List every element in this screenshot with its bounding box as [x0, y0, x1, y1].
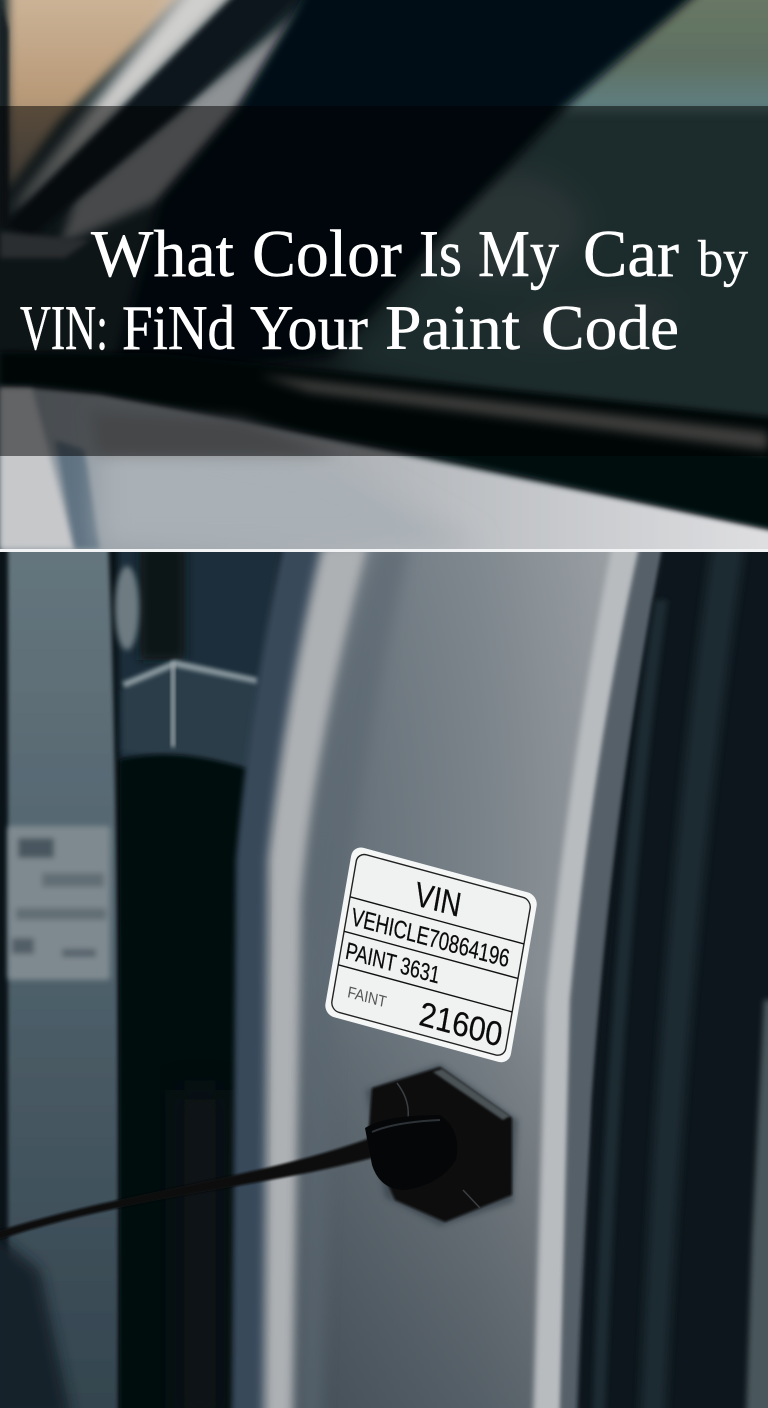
title line 1: by — [698, 231, 748, 288]
left door highlight — [0, 388, 75, 549]
shade beside left highlight — [298, 545, 410, 1408]
title line 2: Code — [541, 292, 679, 363]
blue door shadow — [55, 440, 100, 549]
blurred rear sticker — [8, 826, 110, 980]
title line 2: Your — [250, 292, 368, 363]
title line 1: Car — [583, 217, 679, 291]
socket highlight — [433, 1069, 510, 1120]
hinge bracket — [115, 566, 258, 768]
dark roof pillar — [110, 0, 712, 385]
sill highlight — [260, 375, 768, 450]
dark frame strip — [10, 0, 296, 232]
upper dark blue recess — [118, 545, 282, 770]
main grey pillar — [270, 545, 650, 1408]
far right edge — [746, 1000, 768, 1408]
collar sheen — [372, 1120, 440, 1132]
panel: blurred car window photo — [0, 0, 768, 570]
socket glints — [397, 1083, 480, 1208]
title line 2: FiNd — [122, 292, 235, 363]
left slate door panel — [8, 540, 118, 1408]
white divider — [0, 549, 768, 552]
title line 2: Paint — [385, 292, 520, 363]
socket body — [368, 1067, 512, 1222]
left edge dark trim — [0, 0, 8, 225]
cable — [0, 1138, 372, 1241]
hinge bolt — [115, 566, 139, 650]
mirror shape — [0, 232, 90, 258]
panel: door jamb photo — [0, 540, 768, 1408]
door shade under band — [90, 410, 340, 456]
title line 1: What — [91, 217, 234, 291]
title line 2: VIN: — [20, 292, 108, 363]
grey window frame — [59, 10, 298, 240]
title line 2 — [20, 292, 679, 363]
black plug socket and cable — [0, 1064, 518, 1241]
faint paint label: FAINT — [346, 984, 388, 1011]
plug collar — [365, 1115, 457, 1190]
right highlight — [533, 545, 640, 1408]
title line 1: My — [478, 217, 559, 291]
label heading VIN: VIN — [412, 875, 464, 925]
dark window sill — [0, 352, 768, 535]
white pillar streak — [8, 0, 250, 215]
bottom left shadow — [0, 1230, 72, 1408]
outside background: tan wall — [8, 0, 200, 190]
recess dark column — [140, 545, 185, 660]
pillar dark edge — [232, 545, 335, 1408]
title line 1: Color — [252, 217, 402, 291]
left highlight — [264, 545, 368, 1408]
title — [20, 217, 748, 363]
door panel — [0, 384, 768, 549]
title line 1: Is — [419, 217, 462, 291]
vehicle number: VEHICLE70864196 — [349, 903, 512, 973]
black lower recess — [120, 754, 250, 1408]
seal stripe — [640, 545, 745, 1408]
title line 1 — [91, 217, 748, 291]
right dark seal — [574, 552, 665, 1408]
dark title band — [0, 106, 768, 456]
VIN paint code label — [324, 845, 538, 1065]
paint number: PAINT 3631 — [343, 938, 442, 990]
paint code number: 21600 — [417, 995, 505, 1055]
recess soft sheen — [184, 1100, 216, 1408]
window glass and interior — [338, 70, 768, 418]
socket soft shadow — [366, 1064, 518, 1226]
right shoulder — [560, 545, 664, 1408]
outside background: green and teal — [560, 0, 768, 112]
